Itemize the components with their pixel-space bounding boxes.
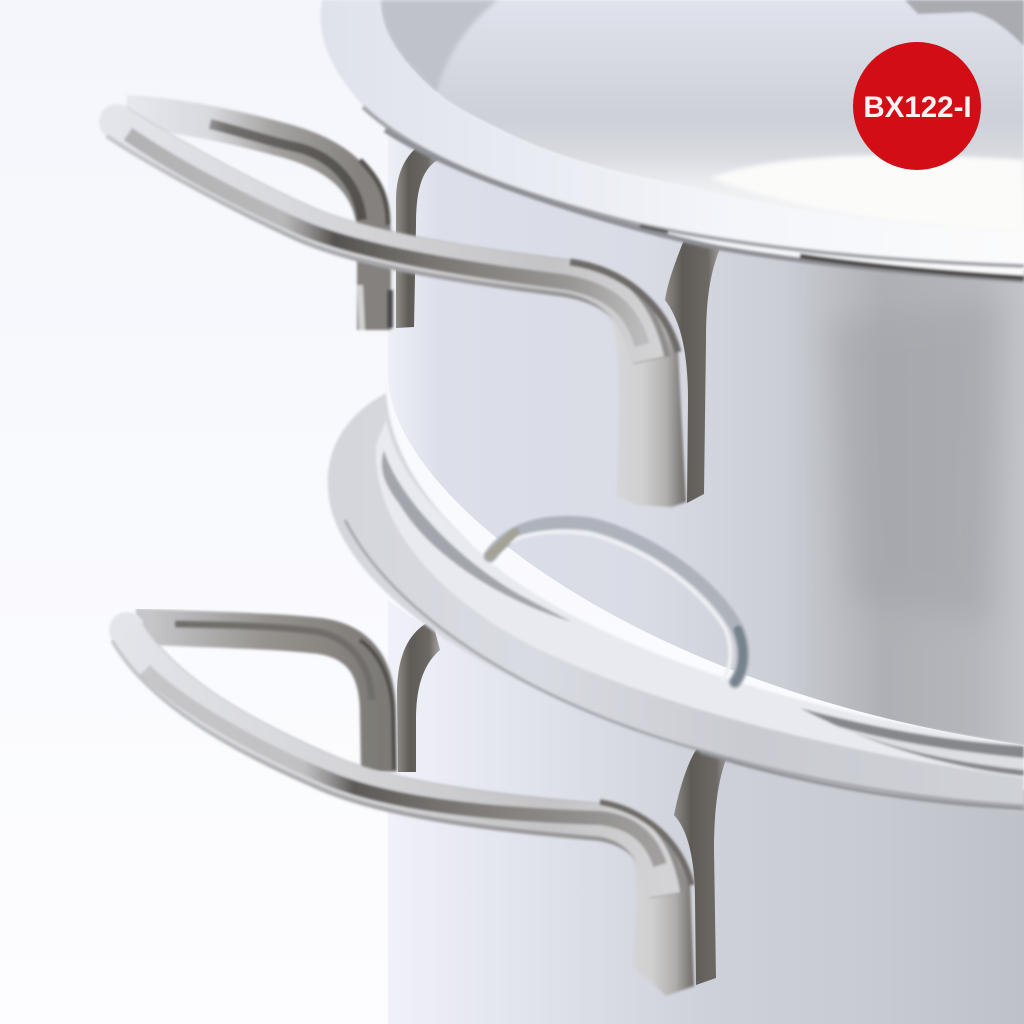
model badge <box>853 42 981 170</box>
upper handle front post <box>665 240 722 503</box>
lid knob bracket <box>905 0 1024 46</box>
lower pot flange ring <box>328 393 1024 812</box>
lid highlight <box>710 155 1024 232</box>
badge text: BX122-I <box>863 91 972 124</box>
upper handle rear tube <box>126 112 390 330</box>
lower handle rear post <box>397 620 440 772</box>
inner side handle seen through the body <box>490 522 743 682</box>
upper pot body <box>388 120 1024 745</box>
lower handle rear tube <box>135 624 394 772</box>
lower pot body <box>388 600 1024 1024</box>
lower handle front post <box>674 745 730 985</box>
lower handle front tube <box>109 612 694 996</box>
upper handle front tube <box>99 104 686 507</box>
upper handle rear post <box>396 140 438 328</box>
flattened end of upper handle <box>590 268 686 507</box>
pot lid interior <box>380 0 1024 232</box>
flattened end of lower handle <box>600 796 694 996</box>
inner lid ledge <box>380 0 498 93</box>
lid rim <box>321 0 1024 280</box>
